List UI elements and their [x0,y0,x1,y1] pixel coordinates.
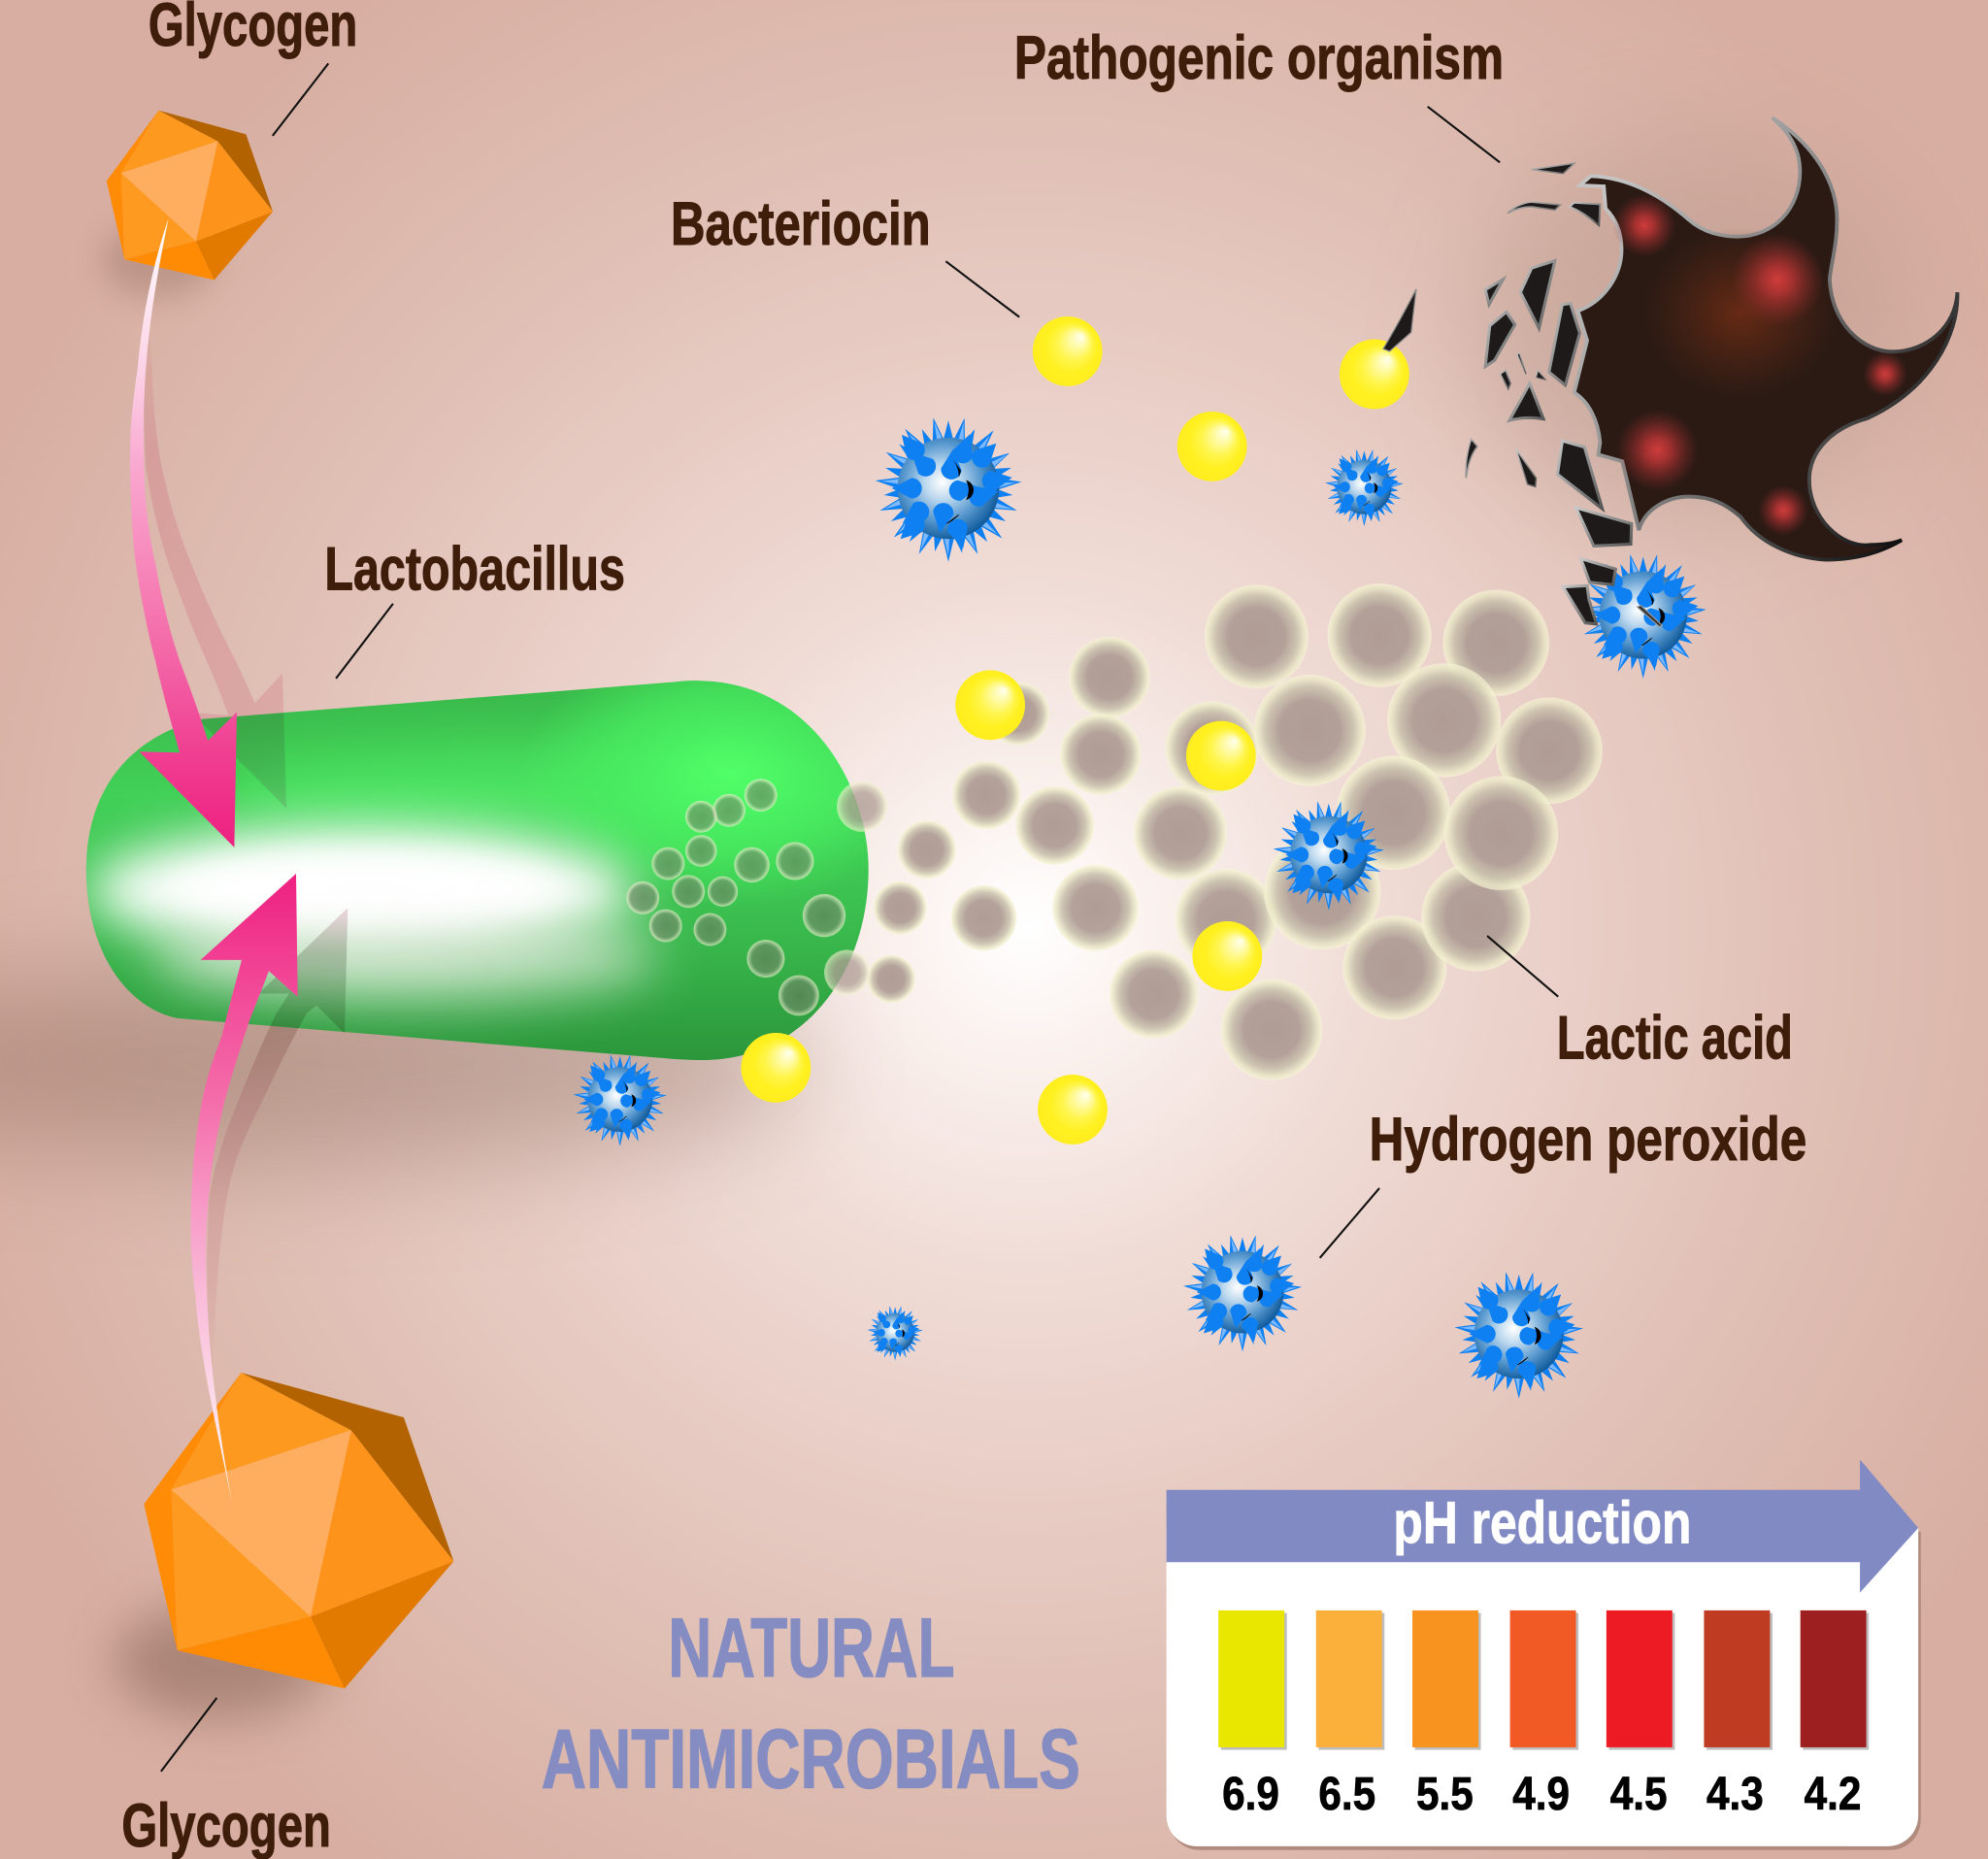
far pathogen fragment [1383,289,1416,351]
red spot [1617,410,1698,491]
pH values: 4.2 [1805,1768,1861,1820]
panel body [1167,1528,1918,1846]
pH values: 5.5 [1416,1768,1474,1820]
pH values [1222,1768,1861,1820]
title [542,1602,1080,1807]
arrow: top ghost [144,305,286,809]
pointer lines [161,63,1558,1772]
label: bacteriocin: Bacteriocin [671,190,931,258]
arrow: bottom ghost [207,908,348,1376]
icon: glycogen bottom [144,1373,453,1688]
title line 2: ANTIMICROBIALS [542,1713,1080,1807]
central brown glow [1644,227,1837,398]
red spot [1758,485,1808,536]
banner text: pH reduction [1393,1490,1691,1557]
lactic acid droplets [824,583,1603,1080]
label: glycogen bottom: Glycogen [121,1792,331,1859]
small polyhedron shadow [101,222,215,298]
panel shadow [1169,1532,1921,1850]
pH values: 6.9 [1222,1768,1279,1820]
droplets inside cell [626,779,845,1015]
red spot [1863,351,1907,396]
icon: glycogen top [107,111,273,280]
red spot [1613,194,1676,257]
red spot [1732,234,1824,326]
pathogen body [1574,117,1958,560]
pH values: 6.5 [1318,1768,1375,1820]
pH values: 4.5 [1610,1768,1668,1820]
pathogenic organism [1466,117,1958,627]
label: pathogenic organism: Pathogenic organism [1014,24,1504,92]
lactobacillus cell [85,681,869,1060]
polyhedron shadow [115,1604,330,1718]
label: lactic acid: Lactic acid [1557,1005,1793,1073]
swatches [1218,1610,1869,1750]
cell shadow [0,961,812,1164]
fragments [1466,163,1662,627]
arrow banner [1167,1459,1918,1593]
label: hydrogen peroxide: Hydrogen peroxide [1370,1106,1806,1174]
title line 1: NATURAL [668,1602,955,1695]
arrow: top pink [130,218,237,847]
bacteriocin balls [741,316,1409,1145]
arrow: bottom pink [190,874,298,1503]
panel: pH reduction [1167,1459,1921,1850]
pH values: 4.3 [1706,1768,1764,1820]
label: lactobacillus: Lactobacillus [324,535,625,603]
pH values: 4.9 [1512,1768,1570,1820]
pathogen shadow [1471,140,1902,520]
hydrogen peroxide particles [573,416,1706,1399]
